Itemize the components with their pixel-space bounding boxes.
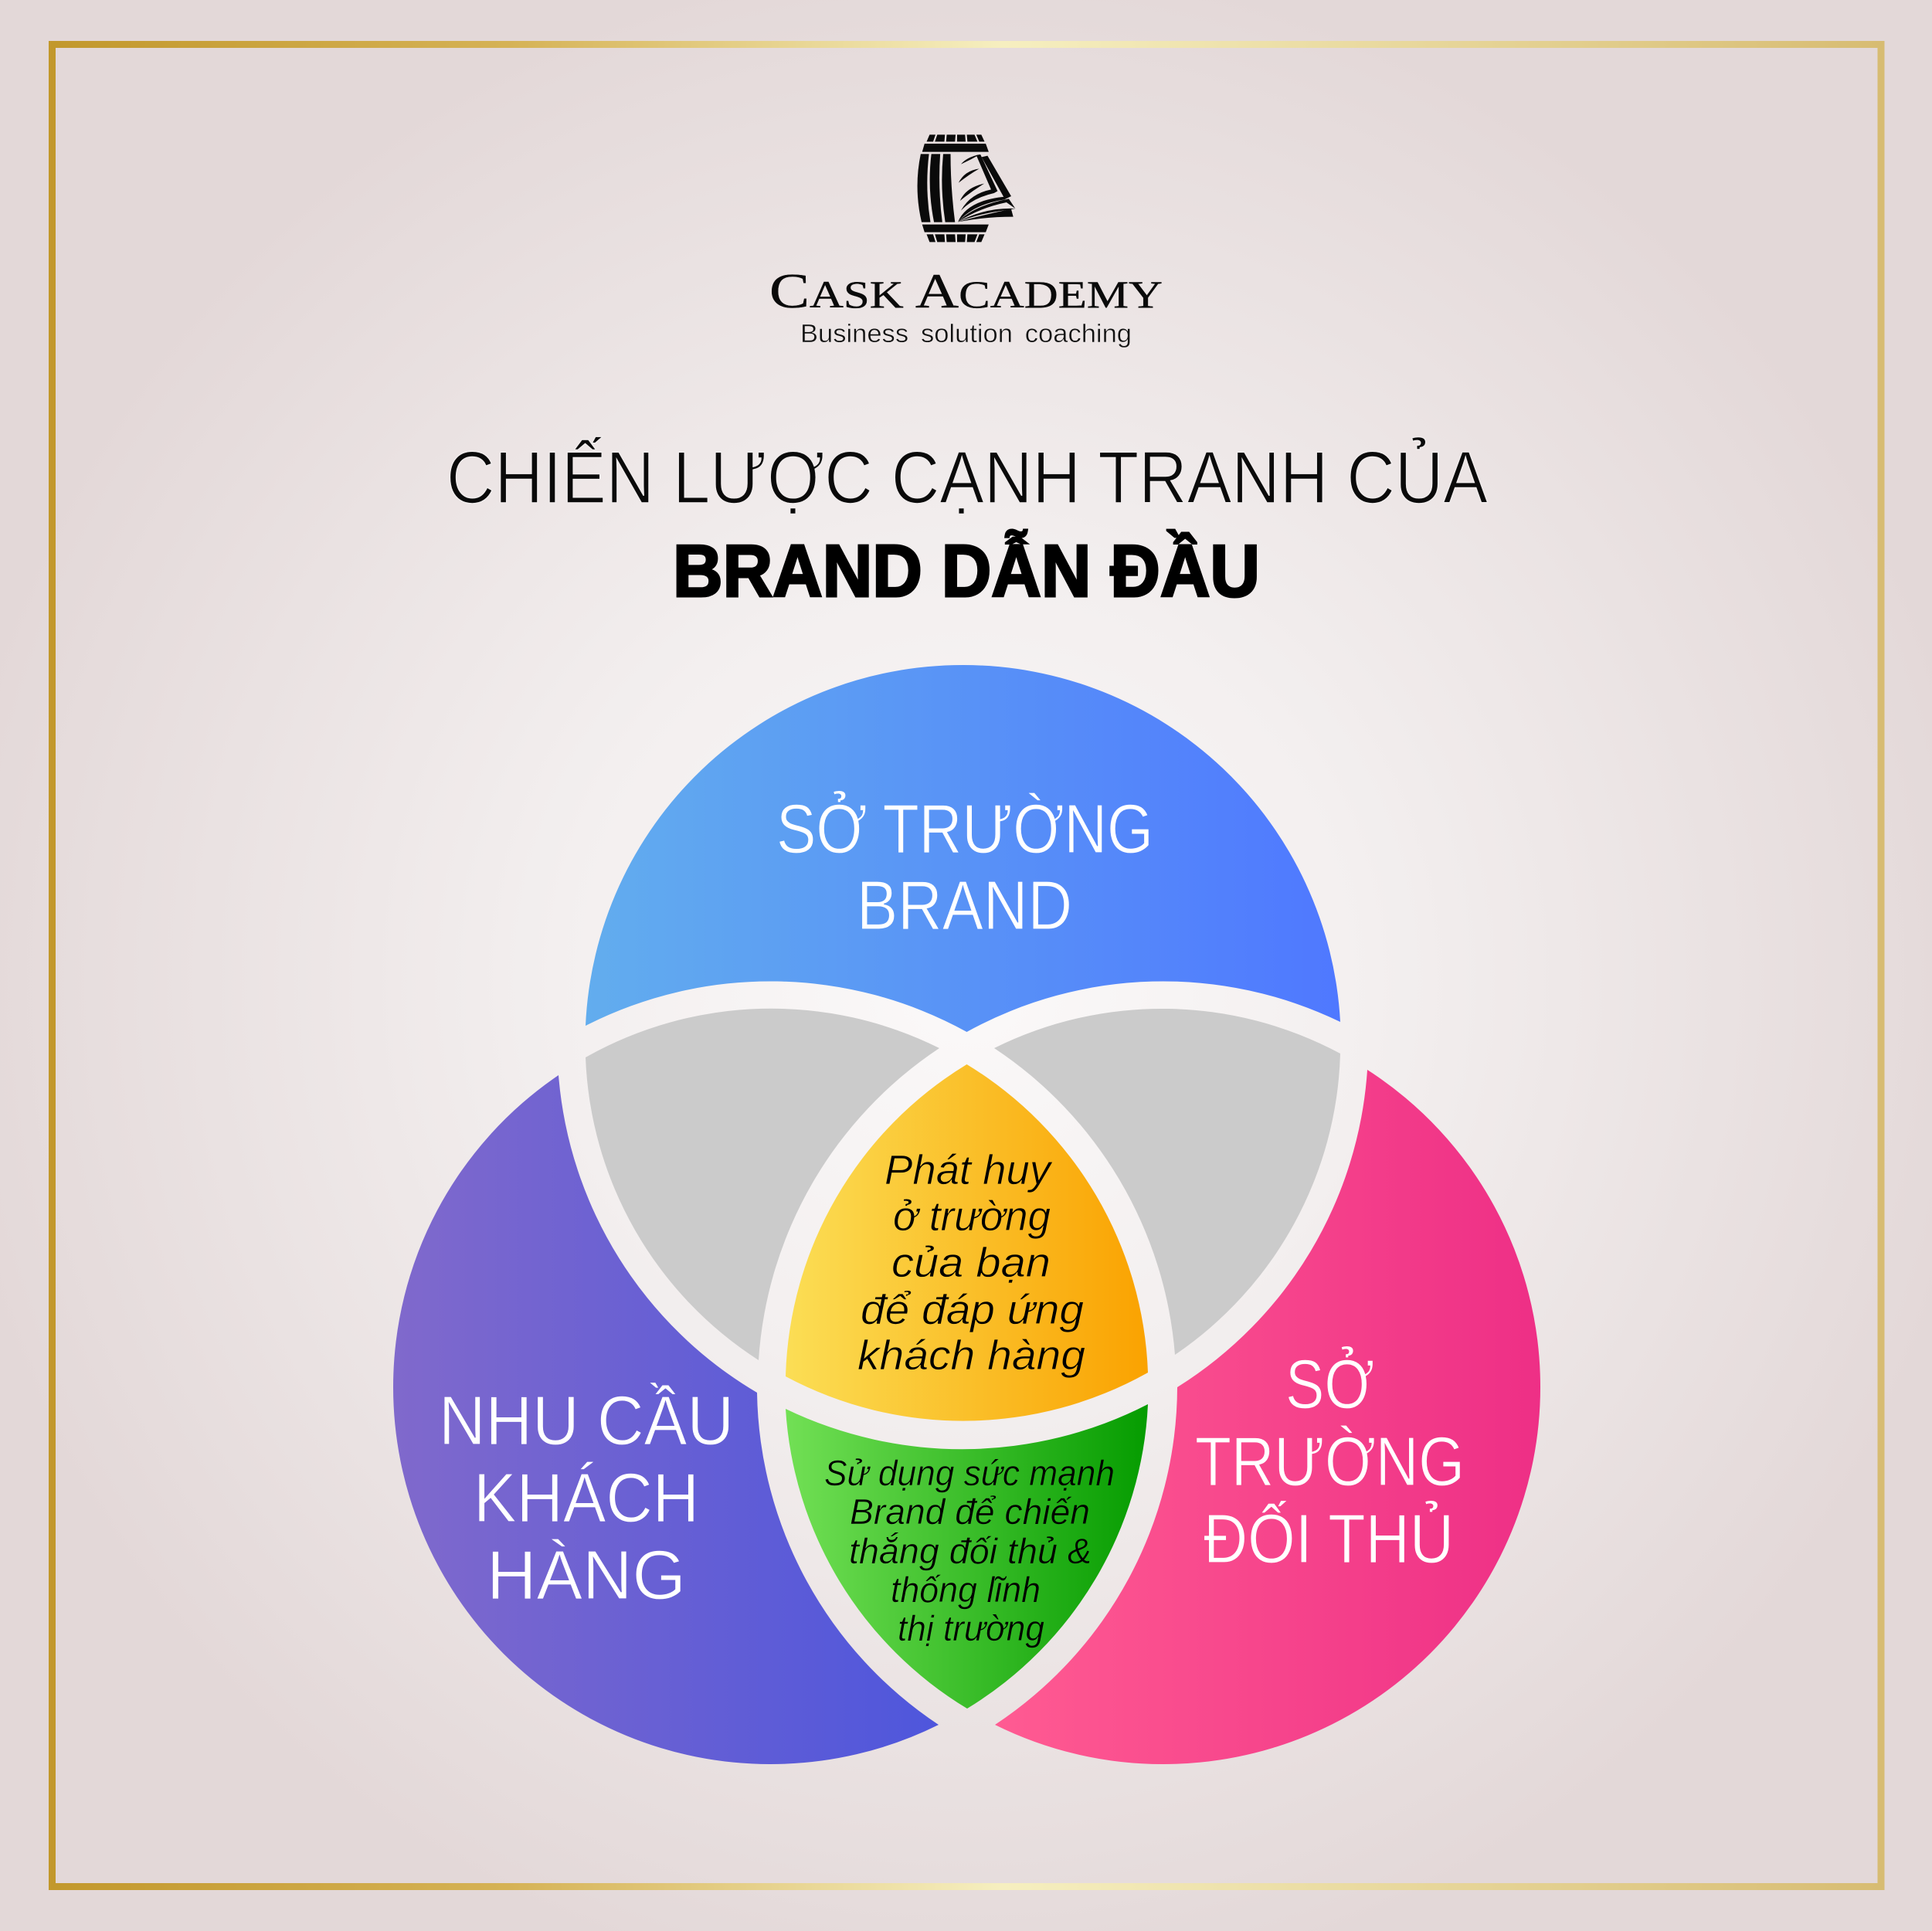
panel: green lower lens (786, 1404, 1148, 1709)
text: su dung suc manh brand (824, 1453, 1115, 1648)
text: phat huy o truong: Phát huy (885, 1147, 1053, 1193)
label: so truong brand: BRAND (857, 867, 1072, 945)
label: nhu cau khach hang (439, 1382, 734, 1614)
text: phat huy o truong: của bạn (891, 1240, 1051, 1286)
panel: brand strength (blue) (586, 665, 1340, 1032)
venn diagram (393, 665, 1540, 1764)
title (446, 436, 1488, 613)
label: so truong doi thu: TRƯỜNG (1195, 1424, 1465, 1501)
panel: grey overlap left (586, 1009, 939, 1360)
text: phat huy o truong (857, 1147, 1085, 1379)
label: nhu cau khach hang: NHU CẦU (439, 1382, 734, 1460)
title line 2: BRAND DẪN ĐẦU (673, 529, 1260, 613)
logo: Cask Academy (769, 134, 1163, 348)
text: phat huy o truong: khách hàng (857, 1332, 1085, 1379)
label: nhu cau khach hang: KHÁCH (474, 1460, 699, 1537)
panel: grey overlap right (994, 1009, 1340, 1355)
text: su dung suc manh brand: thắng đối thủ & (849, 1531, 1092, 1571)
panel: competitor strength (pink) (995, 1070, 1540, 1764)
title line 1: CHIẾN LƯỢC CẠNH TRANH CỦA (446, 436, 1488, 519)
text: phat huy o truong: để đáp ứng (861, 1287, 1084, 1333)
label: so truong doi thu: SỞ (1285, 1345, 1374, 1424)
label: so truong brand: SỞ TRƯỜNG (776, 789, 1153, 868)
text: su dung suc manh brand: Sử dụng sức mạnh (824, 1453, 1115, 1493)
panel: yellow centre (786, 1064, 1148, 1421)
brand name: CASK A CADEMY (769, 263, 1163, 318)
text: phat huy o truong: ở trường (893, 1193, 1051, 1240)
label: so truong doi thu (1195, 1345, 1465, 1578)
text: su dung suc manh brand: thị trường (898, 1608, 1044, 1648)
text: su dung suc manh brand: thống lĩnh (891, 1570, 1041, 1610)
icon: barrel with book (918, 134, 1015, 242)
label: so truong brand (776, 789, 1153, 945)
label: nhu cau khach hang: HÀNG (487, 1537, 686, 1614)
text: su dung suc manh brand: Brand để chiến (850, 1492, 1090, 1532)
panel: customer needs (purple) (393, 1075, 939, 1764)
tagline: Business solution coaching (800, 319, 1132, 348)
label: so truong doi thu: ĐỐI THỦ (1204, 1499, 1454, 1578)
